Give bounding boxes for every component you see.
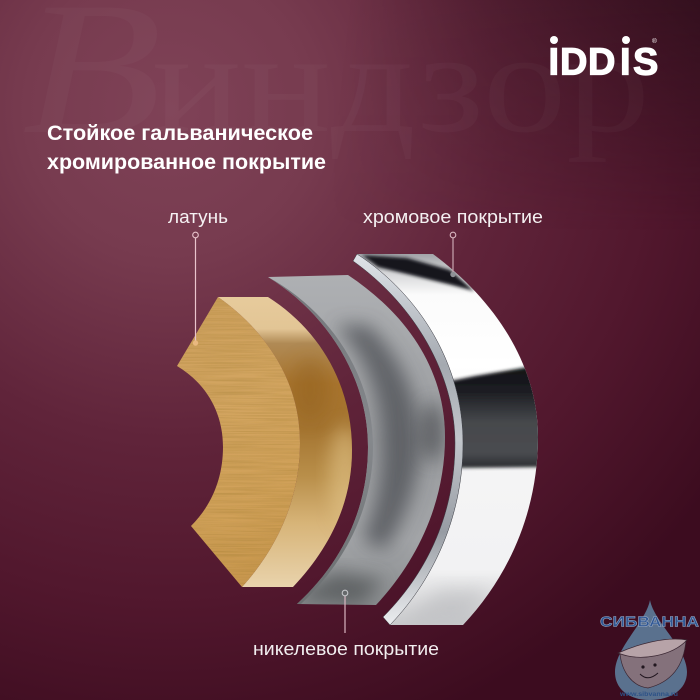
brand text: СИБВАННА	[600, 614, 699, 630]
website: www.sibvanna.ru	[619, 692, 678, 698]
icon: water drop	[615, 600, 687, 700]
chrome middle dark band	[450, 366, 545, 468]
nickel rim	[268, 277, 373, 604]
layer: chrome	[353, 254, 545, 625]
brass side highlight	[294, 358, 352, 520]
nickel reflections	[290, 325, 444, 606]
icon: bathtub	[618, 639, 687, 688]
chrome top dark reflection	[362, 255, 474, 291]
callout: никелевое покрытие	[253, 590, 439, 659]
callout: латунь	[168, 206, 228, 346]
brass face brushing	[177, 297, 300, 587]
brass side	[218, 297, 352, 587]
callout: хромовое покрытие	[363, 206, 543, 277]
logo: IDDIS: IDDIS	[548, 42, 658, 84]
nickel face	[268, 275, 445, 605]
callout: хромовое покрытие: хромовое покрытие	[363, 206, 543, 227]
title: Стойкое гальваническое	[47, 121, 313, 145]
callout: латунь: латунь	[168, 206, 228, 227]
watermark: Виндзор	[22, 0, 650, 174]
watermark logo: Сибванна	[600, 600, 699, 700]
layer: brass	[177, 297, 361, 587]
logo: IDDIS: ®	[652, 37, 657, 45]
title	[47, 121, 326, 174]
watermark: Виндзор: индзор	[152, 3, 650, 163]
callout: никелевое покрытие: никелевое покрытие	[253, 638, 439, 659]
chrome face	[357, 254, 538, 625]
title: хромированное покрытие	[47, 150, 326, 174]
brass face	[177, 297, 300, 587]
layer: nickel	[268, 275, 445, 606]
chrome bottom shade	[416, 584, 485, 625]
chrome rim	[353, 254, 463, 625]
